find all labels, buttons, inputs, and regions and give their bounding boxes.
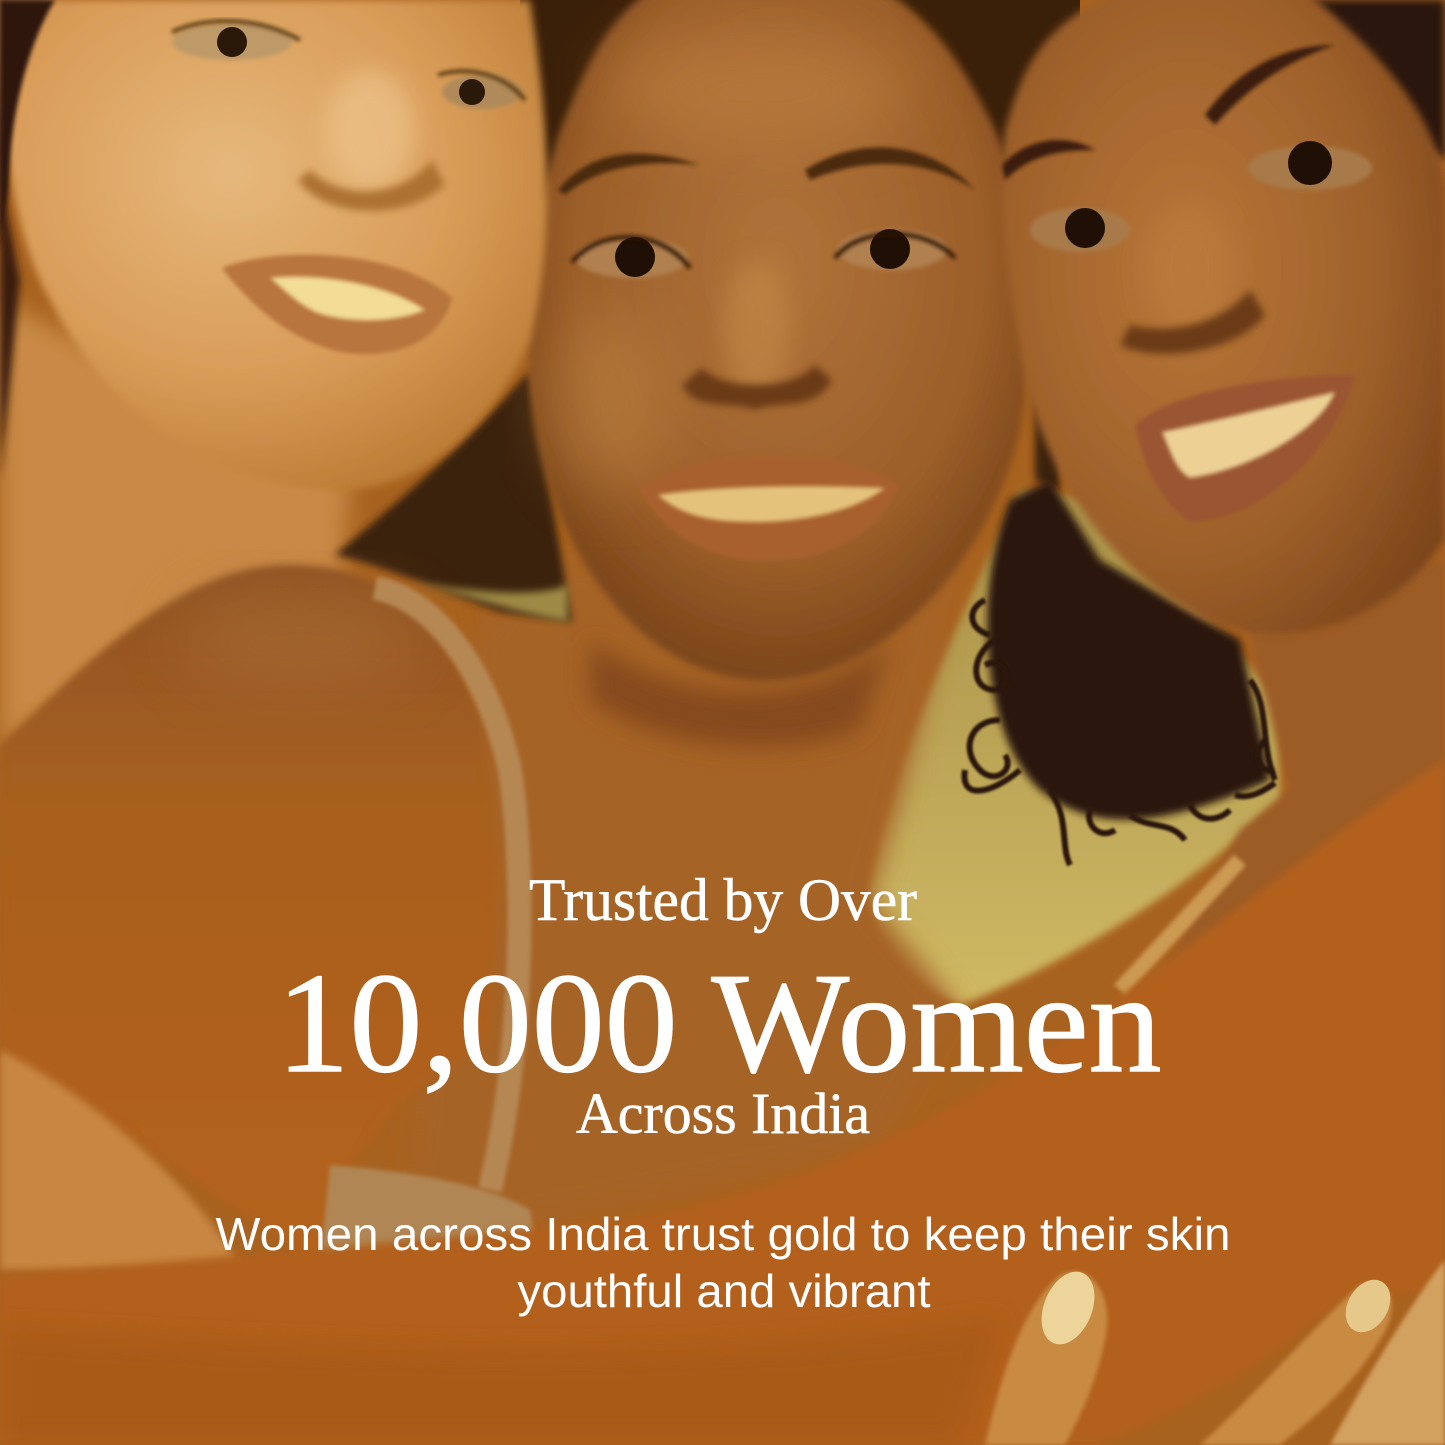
center woman nose: [682, 260, 832, 410]
center cheek highlight: [550, 310, 670, 490]
right woman mouth: [1135, 375, 1355, 522]
right woman face: [1002, 0, 1445, 634]
dark hair behind center woman: [335, 370, 572, 622]
left woman hair: [0, 0, 50, 480]
top hair backing: [520, 0, 1080, 200]
center woman: neck and chest: [400, 560, 960, 1250]
left woman lower body: [0, 1050, 240, 1270]
headline: 10,000 women: 10,000 Women: [276, 944, 1162, 1102]
right woman nose: [1120, 205, 1265, 354]
right woman eyes: [1030, 141, 1372, 252]
left woman nose: [298, 70, 445, 211]
body text: Women across India trust gold to keep their skin: [216, 1208, 1230, 1260]
left woman hair edge: [0, 0, 55, 250]
left woman eyes: [172, 21, 525, 109]
left shoulder arm of center woman: [0, 565, 500, 1265]
center woman hair side: [1010, 180, 1060, 490]
shoulder highlight: [180, 590, 420, 690]
body text: youthful and vibrant: [518, 1265, 931, 1317]
dress top: [320, 1165, 540, 1265]
heading: trusted by over: Trusted by Over: [529, 867, 917, 933]
arm lower shading: [0, 1320, 1000, 1445]
dress strap: [375, 588, 520, 1190]
center neck shadow: [590, 640, 890, 747]
right woman brows: [1002, 140, 1095, 180]
hand fingers: [985, 1260, 1445, 1445]
right woman top hair: [1275, 0, 1445, 160]
right arm hugging across: [0, 760, 1445, 1445]
right woman neck and shoulder: [1150, 560, 1445, 1100]
left woman face: [0, 0, 547, 490]
left woman mouth: [222, 255, 452, 354]
bright backdrop behind hair: [868, 490, 1280, 1005]
stray backdrop under left hair: [390, 580, 568, 622]
right woman strap: [1120, 860, 1240, 990]
right woman hair curls: [964, 480, 1275, 865]
center woman mouth: [640, 456, 898, 561]
body text: [216, 1208, 1230, 1317]
center woman eyes: [572, 229, 955, 278]
center woman brows: [558, 154, 700, 195]
subheading: across india: Across India: [576, 1081, 870, 1146]
left woman: neck and chest: [0, 300, 350, 750]
center woman face: [528, 0, 1030, 681]
